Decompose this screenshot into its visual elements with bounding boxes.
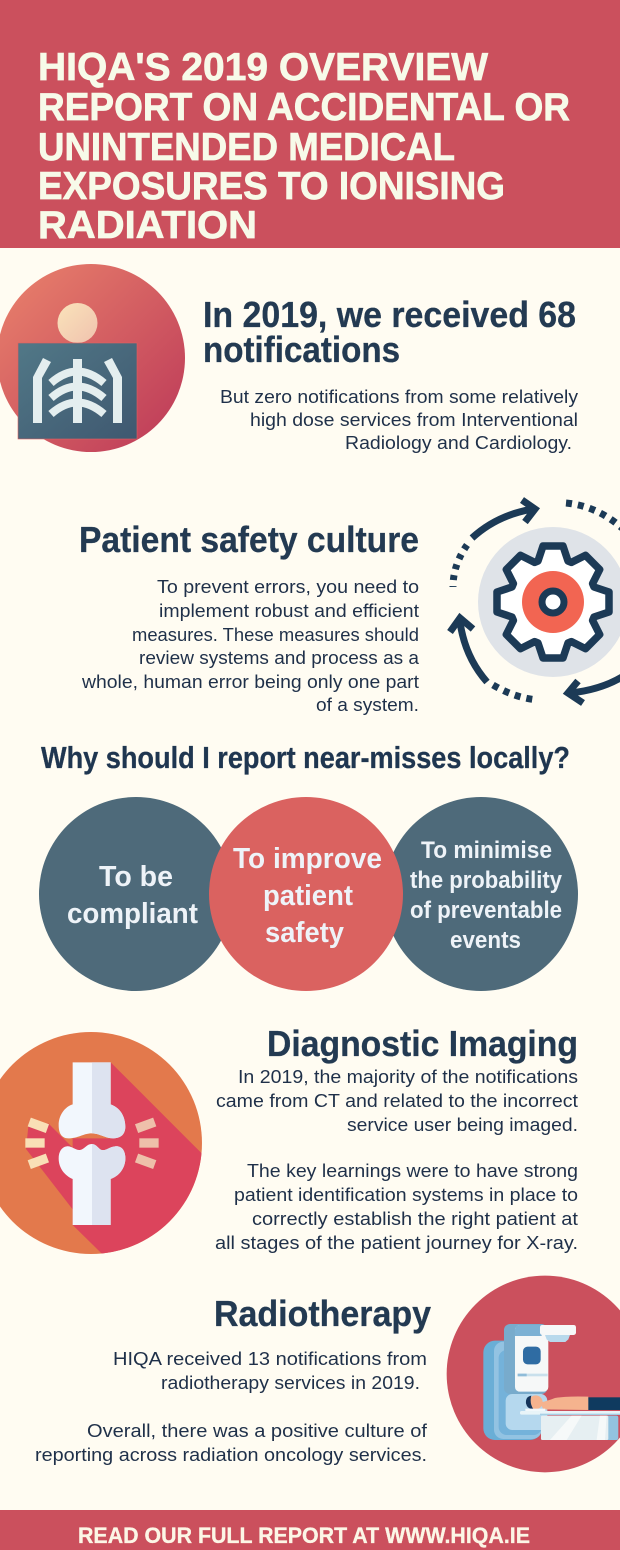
- text: preventing errors: of a system.: [316, 694, 419, 715]
- heading: notifications: In 2019, we received 68: [203, 294, 576, 335]
- footer banner: [0, 1510, 620, 1550]
- text: preventing errors: review systems and process as a: [139, 647, 420, 668]
- text: preventing errors: To prevent errors, you need to: [157, 576, 419, 597]
- heading: diagnostic imaging: Diagnostic Imaging: [267, 1023, 578, 1064]
- text: CT notifications: [216, 1066, 578, 1135]
- circle: to improve patient safety: [209, 797, 403, 991]
- circle: to minimise: events: [450, 927, 521, 954]
- icon: gear with cycle arrows: [450, 500, 620, 703]
- section: radiotherapy: [35, 1293, 431, 1465]
- text: preventing errors: measures. These measures should: [132, 624, 419, 645]
- text: key learnings: [215, 1160, 578, 1253]
- circle: to improve patient safety: patient: [263, 880, 353, 912]
- title banner: UNINTENDED MEDICAL: [38, 126, 455, 169]
- heading: patient safety culture: Patient safety culture: [79, 519, 419, 560]
- section: diagnostic imaging: [215, 1023, 578, 1253]
- text: preventing errors: implement robust and efficient: [159, 600, 419, 621]
- circle: to improve patient safety: safety: [265, 917, 344, 949]
- heading: radiotherapy: Radiotherapy: [214, 1293, 431, 1334]
- text: key learnings: all stages of the patient journey for X-ray.: [215, 1232, 578, 1253]
- text: CT notifications: service user being imaged.: [347, 1114, 578, 1135]
- title banner: [0, 0, 620, 248]
- text: radiotherapy notifications: [113, 1348, 427, 1393]
- icon: radiotherapy machine: [447, 1276, 620, 1472]
- icon: chest x-ray: [0, 264, 185, 452]
- circles: reasons to report: [39, 797, 578, 991]
- circle: to minimise: of preventable: [410, 897, 562, 924]
- text: preventing errors: [81, 576, 420, 715]
- circle: to minimise: the probability: [410, 867, 562, 894]
- title banner: EXPOSURES TO IONISING: [38, 165, 505, 208]
- text: radiotherapy notifications: radiotherapy services in 2019.: [161, 1372, 420, 1393]
- text: reporting culture: [35, 1420, 428, 1465]
- heading: notifications: notifications: [203, 329, 400, 370]
- text: key learnings: patient identification systems in place to: [234, 1184, 578, 1205]
- text: radiotherapy notifications: HIQA received 13 notifications from: [113, 1348, 427, 1369]
- text: CT notifications: In 2019, the majority of the notifications: [238, 1066, 578, 1087]
- title banner: REPORT ON ACCIDENTAL OR: [38, 86, 570, 129]
- circle: to improve patient safety: To improve: [233, 843, 382, 875]
- circle: to minimise: To minimise: [421, 837, 552, 864]
- text: zero notifications: Radiology and Cardiology.: [345, 432, 572, 453]
- circle: to be compliant: compliant: [67, 898, 198, 930]
- text: reporting culture: Overall, there was a positive culture of: [87, 1420, 428, 1441]
- title banner: HIQA'S 2019 OVERVIEW: [38, 46, 488, 89]
- text: zero notifications: [220, 386, 579, 453]
- circle: to be compliant: To be: [99, 861, 173, 893]
- text: CT notifications: came from CT and related to the incorrect: [216, 1090, 578, 1111]
- text: reporting culture: reporting across radiation oncology services.: [35, 1444, 427, 1465]
- text: preventing errors: whole, human error being only one part: [81, 671, 419, 692]
- section: notifications: [203, 294, 579, 453]
- text: zero notifications: But zero notifications from some relatively: [220, 386, 579, 407]
- text: zero notifications: high dose services from Interventional: [250, 409, 578, 430]
- text: key learnings: The key learnings were to have strong: [247, 1160, 578, 1181]
- circle: to be compliant: [39, 797, 233, 991]
- icon: knee joint: [0, 1032, 213, 1265]
- title banner: RADIATION: [38, 204, 257, 247]
- circle: to minimise: [384, 797, 578, 991]
- text: key learnings: correctly establish the right patient at: [252, 1208, 578, 1229]
- heading: notifications: [203, 294, 576, 370]
- footer banner: READ OUR FULL REPORT AT WWW.HIQA.IE: [78, 1523, 530, 1548]
- section: patient safety culture: [79, 519, 420, 715]
